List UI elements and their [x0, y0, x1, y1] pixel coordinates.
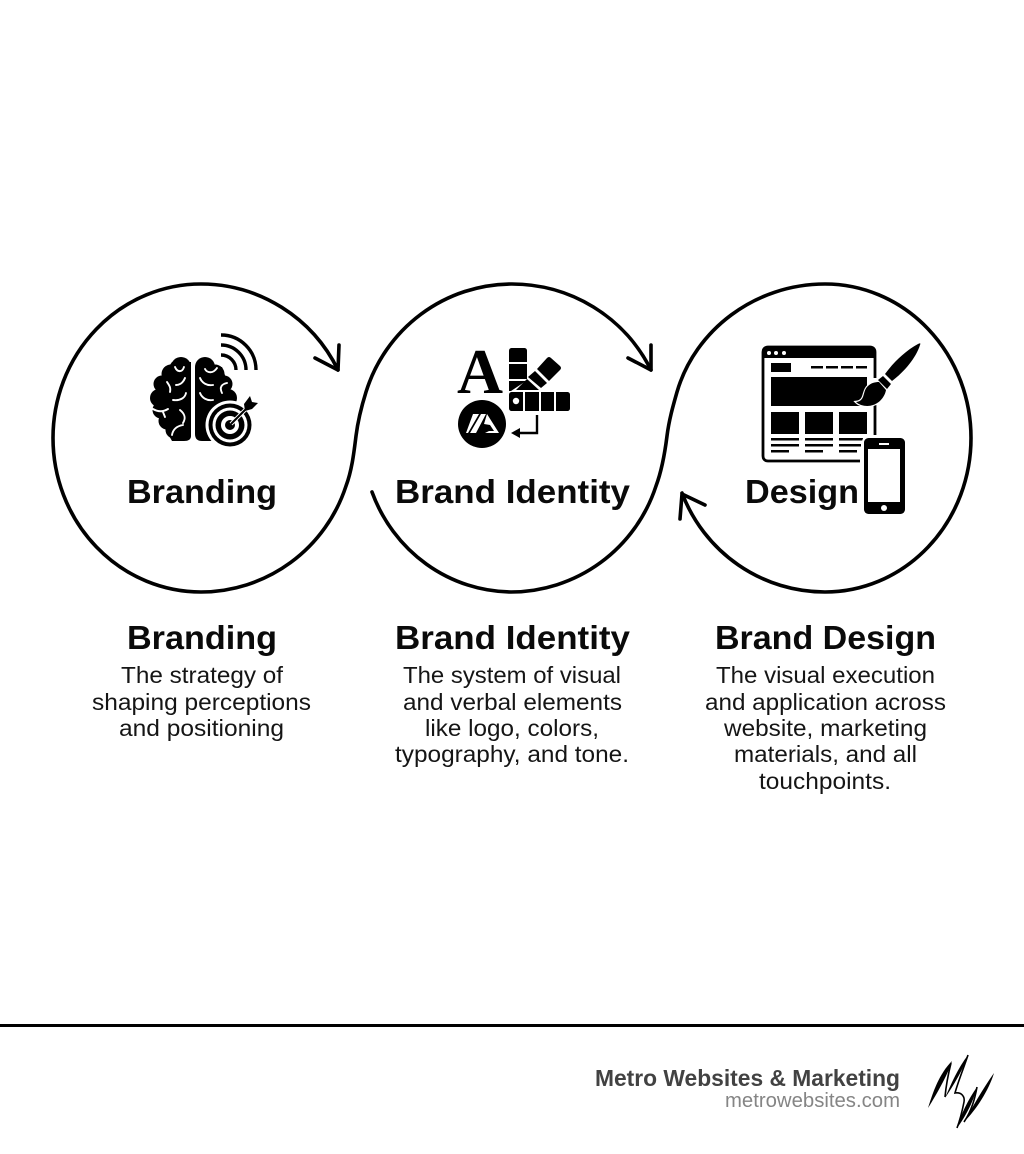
target: [206, 400, 254, 450]
round logo badge: [458, 400, 506, 448]
description: Brand Identity: The system of visual: [403, 662, 621, 688]
browser window: [763, 347, 875, 461]
flow loop: second circle into third: [372, 284, 971, 592]
circle label: Branding: Branding: [127, 473, 277, 510]
description: Branding: [92, 662, 311, 741]
brain right hemisphere: [195, 357, 237, 441]
arrowhead: first circle: [315, 345, 339, 370]
brain left hemisphere: [150, 357, 191, 441]
return arrow: [514, 415, 537, 433]
description: Brand Design: website, marketing: [723, 715, 927, 741]
description: Brand Identity: and verbal elements: [403, 689, 622, 715]
arrowhead: third circle: [680, 494, 705, 519]
heading: Branding: Branding: [127, 619, 277, 656]
description: Brand Design: [705, 662, 946, 794]
brain folds: [153, 367, 227, 435]
description: Brand Design: materials, and all: [734, 741, 917, 767]
description: Branding: and positioning: [119, 715, 284, 741]
description: Branding: shaping perceptions: [92, 689, 311, 715]
icon: brain with signal and target: [150, 335, 258, 450]
icon: type, swatches and logo: [457, 337, 570, 448]
description: Brand Design: touchpoints.: [759, 768, 891, 794]
icon: MW signature logo: [928, 1055, 994, 1128]
smartphone: [862, 436, 907, 516]
serif letter A: A: [457, 337, 504, 407]
text block: Branding: [92, 619, 311, 741]
paintbrush: [856, 382, 886, 406]
icon: website, paintbrush and phone: [763, 343, 920, 516]
description: Brand Identity: [395, 662, 629, 767]
description: Branding: The strategy of: [121, 662, 283, 688]
signal waves: [221, 335, 256, 370]
description: Brand Design: and application across: [705, 689, 946, 715]
text block: Brand Design: [705, 619, 946, 794]
circle label: Design: Design: [745, 473, 859, 510]
colour swatch fan: [509, 348, 570, 411]
arrowhead: second circle: [628, 345, 651, 370]
description: Brand Design: The visual execution: [716, 662, 935, 688]
description: Brand Identity: typography, and tone.: [395, 741, 629, 767]
description: Brand Identity: like logo, colors,: [425, 715, 599, 741]
text block: Brand Identity: [395, 619, 631, 767]
flow loop: first circle into second: [53, 284, 971, 592]
footer company name: Metro Websites & Marketing: [595, 1065, 900, 1091]
circle label: Brand Identity: Brand Identity: [395, 473, 631, 510]
footer website: metrowebsites.com: [725, 1090, 900, 1112]
heading: Brand Design: Brand Design: [715, 619, 936, 656]
heading: Brand Identity: Brand Identity: [395, 619, 631, 656]
